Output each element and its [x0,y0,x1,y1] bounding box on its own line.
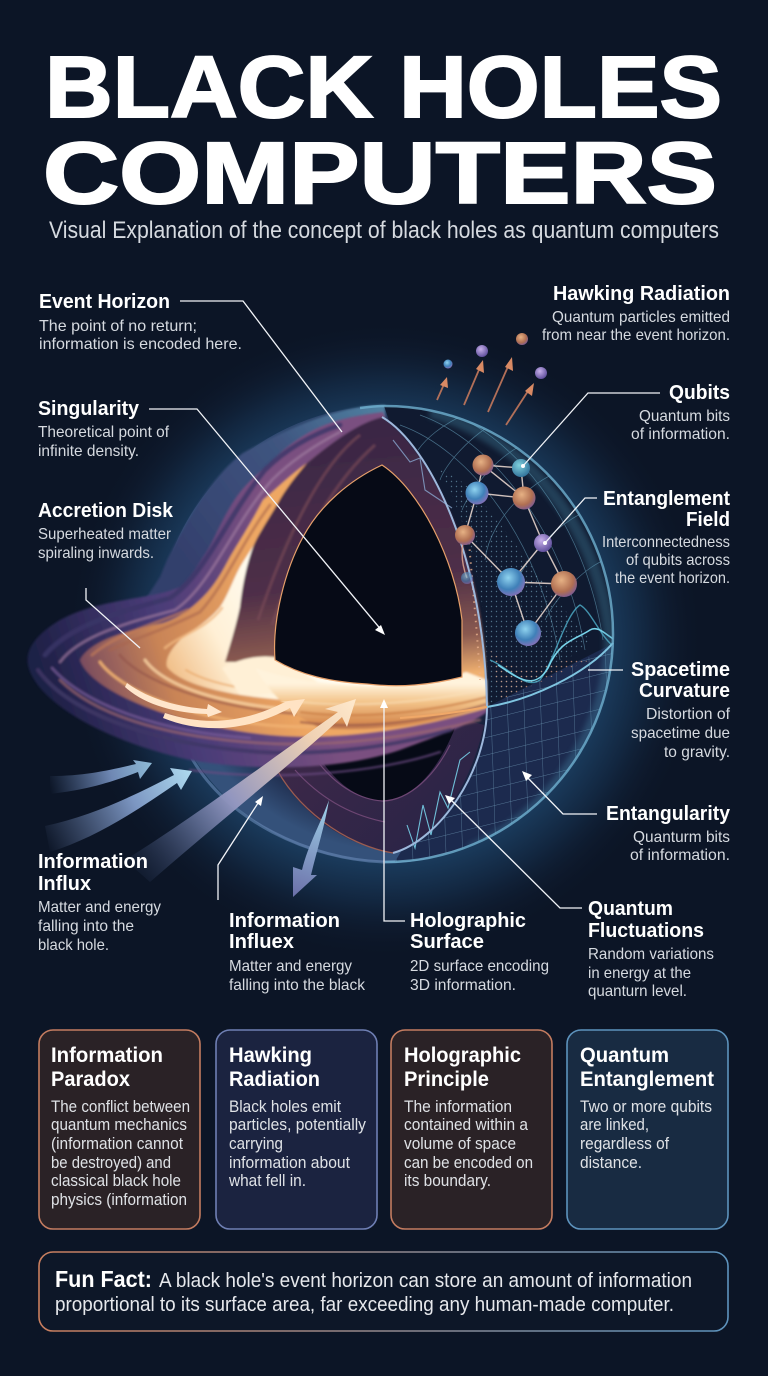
cream streaks [145,608,482,711]
label: entangularity [606,802,731,864]
card: holographic principle: The information [404,1097,512,1116]
card: quantum entanglement [567,1030,728,1229]
arrow: downward [293,800,329,897]
label: accretion disk: spiraling inwards. [38,545,154,562]
disk inner cream [167,527,478,702]
sphere glow [65,320,705,960]
card: holographic principle: its boundary. [404,1171,491,1190]
qubit network [455,454,577,646]
leader lines [86,301,660,921]
card: information paradox: quantum mechanics [51,1115,187,1134]
card: holographic principle: Holographic [404,1044,521,1067]
hawking particles and arrows [437,333,547,425]
qubit links [462,465,564,633]
title [43,39,722,222]
leader: spacetime curvature [588,669,623,671]
leader: quantum fluctuations [449,798,582,908]
card: holographic principle [391,1030,552,1229]
lower grid [396,649,612,862]
label: information influex: Matter and energy [229,958,352,975]
label: singularity: Singularity [38,397,140,420]
label: information influx: Matter and energy [38,899,161,916]
leader: entangularity [525,775,597,814]
card: hawking radiation: Hawking [229,1044,312,1067]
label: entanglement field: of qubits across [626,552,730,569]
lower shell fill [395,646,612,862]
label: information influex: Information [229,909,340,932]
label: qubits [631,381,730,443]
label: spacetime curvature: Distortion of [646,706,731,723]
label: quantum fluctuations: Random variations [588,946,714,963]
card: hawking radiation: particles, potentially [229,1115,366,1134]
black hole core [275,465,462,686]
title: BLACK HOLES [45,39,722,136]
card: information paradox: classical black hole [51,1171,181,1190]
leader: information influex [218,800,260,900]
label: information influex: falling into the black [229,977,366,994]
label: quantum fluctuations: quanturn level. [588,983,687,1000]
equator orange thread [400,707,487,718]
label: entangularity: Quanturm bits [633,829,730,846]
label: entanglement field: Field [686,508,730,531]
arrow: influx 1 [50,760,152,794]
label: singularity [38,397,170,460]
card: hawking radiation: information about [229,1153,350,1172]
card: information paradox: The conflict between [51,1097,190,1116]
arrow: swirl 1 [125,683,222,717]
arrowhead: entangularity [522,771,532,781]
card: hawking radiation: Black holes emit [229,1097,341,1116]
label: event horizon: The point of no return; [39,318,197,335]
disk outer purple [27,412,487,767]
label: holographic surface [410,909,549,994]
label: qubits: Quantum bits [639,408,730,425]
label: entanglement field: Entanglement [603,487,730,510]
equator [487,643,613,707]
qubits [455,454,577,646]
card: holographic principle: Principle [404,1068,489,1091]
label: event horizon: information is encoded here. [39,336,242,353]
label: hawking radiation [542,282,730,344]
label: information influx: Influx [38,872,92,895]
label: event horizon: Event Horizon [39,290,170,313]
cut-away wedge interior [225,417,486,700]
label: quantum fluctuations: in energy at the [588,965,691,982]
card: hawking radiation: Radiation [229,1068,320,1091]
fluctuation waves [393,440,480,848]
leader: singularity [149,409,383,632]
right shell with grid [382,400,620,870]
leader: qubits [523,393,660,466]
label: information influx: falling into the [38,918,134,935]
label: holographic surface: 3D information. [410,977,516,994]
arrowhead: quantum fluctuations [445,795,455,804]
swirl strokes [38,425,487,775]
label: spacetime curvature [631,658,731,761]
label: holographic surface: 2D surface encoding [410,958,549,975]
upper left sphere shell [145,405,385,600]
label: event horizon [39,290,242,353]
label: qubits: Qubits [669,381,730,404]
label: holographic surface: Holographic [410,909,526,932]
fun fact panel [39,1252,728,1331]
leader: entanglement field [545,498,597,543]
label: spacetime curvature: to gravity. [664,744,730,761]
leader: holographic surface [384,706,405,921]
arrowhead: singularity [375,625,385,635]
card: holographic principle: can be encoded on [404,1153,533,1172]
wedge streaks [258,435,375,625]
arrow: influx 3 [125,699,356,882]
label: spacetime curvature: Spacetime [631,658,730,681]
disk orange band [80,417,487,737]
label: information influex: Influex [229,930,295,953]
fun fact panel: Fun Fact: [55,1266,152,1292]
label: information influx [38,850,161,954]
label: hawking radiation: Hawking Radiation [553,282,730,305]
label: spacetime curvature: Curvature [639,679,730,702]
arrow: influx 2 [45,768,192,852]
leader end dot: entanglement field [543,541,547,545]
card: hawking radiation: what fell in. [228,1171,306,1190]
card: quantum entanglement: Entanglement [580,1068,714,1091]
dot fields [440,470,590,705]
label: singularity: infinite density. [38,443,139,460]
label: information influex [229,909,366,994]
card: quantum entanglement: regardless of [580,1134,669,1153]
card: quantum entanglement: distance. [580,1153,642,1172]
label: spacetime curvature: spacetime due [631,725,730,742]
card: information paradox: be destroyed) and [51,1153,171,1172]
card: information paradox [39,1030,200,1229]
card: information paradox: Information [51,1044,163,1067]
label: hawking radiation: Quantum particles emitted [552,309,730,326]
cream over wedge base [222,656,330,695]
fun fact panel: proportional to its surface area, far exceeding any human-made computer. [55,1293,674,1316]
leader: event horizon [180,301,342,432]
inflow arrows [45,683,356,897]
label: entangularity: Entangularity [606,802,731,825]
leader: accretion disk [86,588,140,648]
label: quantum fluctuations: Quantum [588,897,673,920]
lower wedge [273,715,484,853]
label: entanglement field [602,487,730,587]
label: qubits: of information. [631,426,730,443]
label: accretion disk: Superheated matter [38,526,172,543]
leader end dot: qubits [521,464,525,468]
upper shell fill [382,400,620,707]
label: quantum fluctuations [588,897,714,1000]
arrow: swirl 2 [163,699,305,728]
label: accretion disk [38,499,174,562]
card: hawking radiation: carrying [229,1134,283,1153]
band beneath the hole [255,668,487,729]
label: entanglement field: Interconnectedness [602,534,730,551]
accretion disk [27,412,487,775]
card: holographic principle: volume of space [404,1134,516,1153]
card: information paradox: Paradox [51,1068,130,1091]
lower sphere rim [190,755,545,862]
card: hawking radiation [216,1030,377,1229]
black hole diagram [27,282,731,1331]
label: information influx: black hole. [38,937,109,954]
upper shell grid arcs [400,410,605,660]
title: COMPUTERS [43,125,717,222]
card: information paradox: physics (information [51,1190,187,1209]
card: quantum entanglement: Quantum [580,1044,669,1067]
card: holographic principle: contained within a [404,1115,528,1134]
card: quantum entanglement: are linked, [580,1115,649,1134]
label: entangularity: of information. [630,847,730,864]
label: quantum fluctuations: Fluctuations [588,919,704,942]
arrowhead: holographic surface [380,699,388,708]
label: information influx: Information [38,850,148,873]
card: information paradox: (information cannot [51,1134,183,1153]
label: accretion disk: Accretion Disk [38,499,174,522]
arrowhead: information influex [255,796,263,806]
sphere body [157,406,613,862]
spacetime wave [490,605,612,683]
sphere outline [360,406,613,862]
cut plane edge [382,417,487,853]
label: holographic surface: Surface [410,930,484,953]
stripes beneath the hole [300,690,487,725]
fun fact panel: A black hole's event horizon can store an amount of information [159,1269,692,1292]
label: hawking radiation: from near the event horizon. [542,327,730,344]
label: entanglement field: the event horizon. [615,570,730,587]
right sphere rim glow [430,412,610,850]
card: quantum entanglement: Two or more qubits [580,1097,712,1116]
label: singularity: Theoretical point of [38,424,170,441]
